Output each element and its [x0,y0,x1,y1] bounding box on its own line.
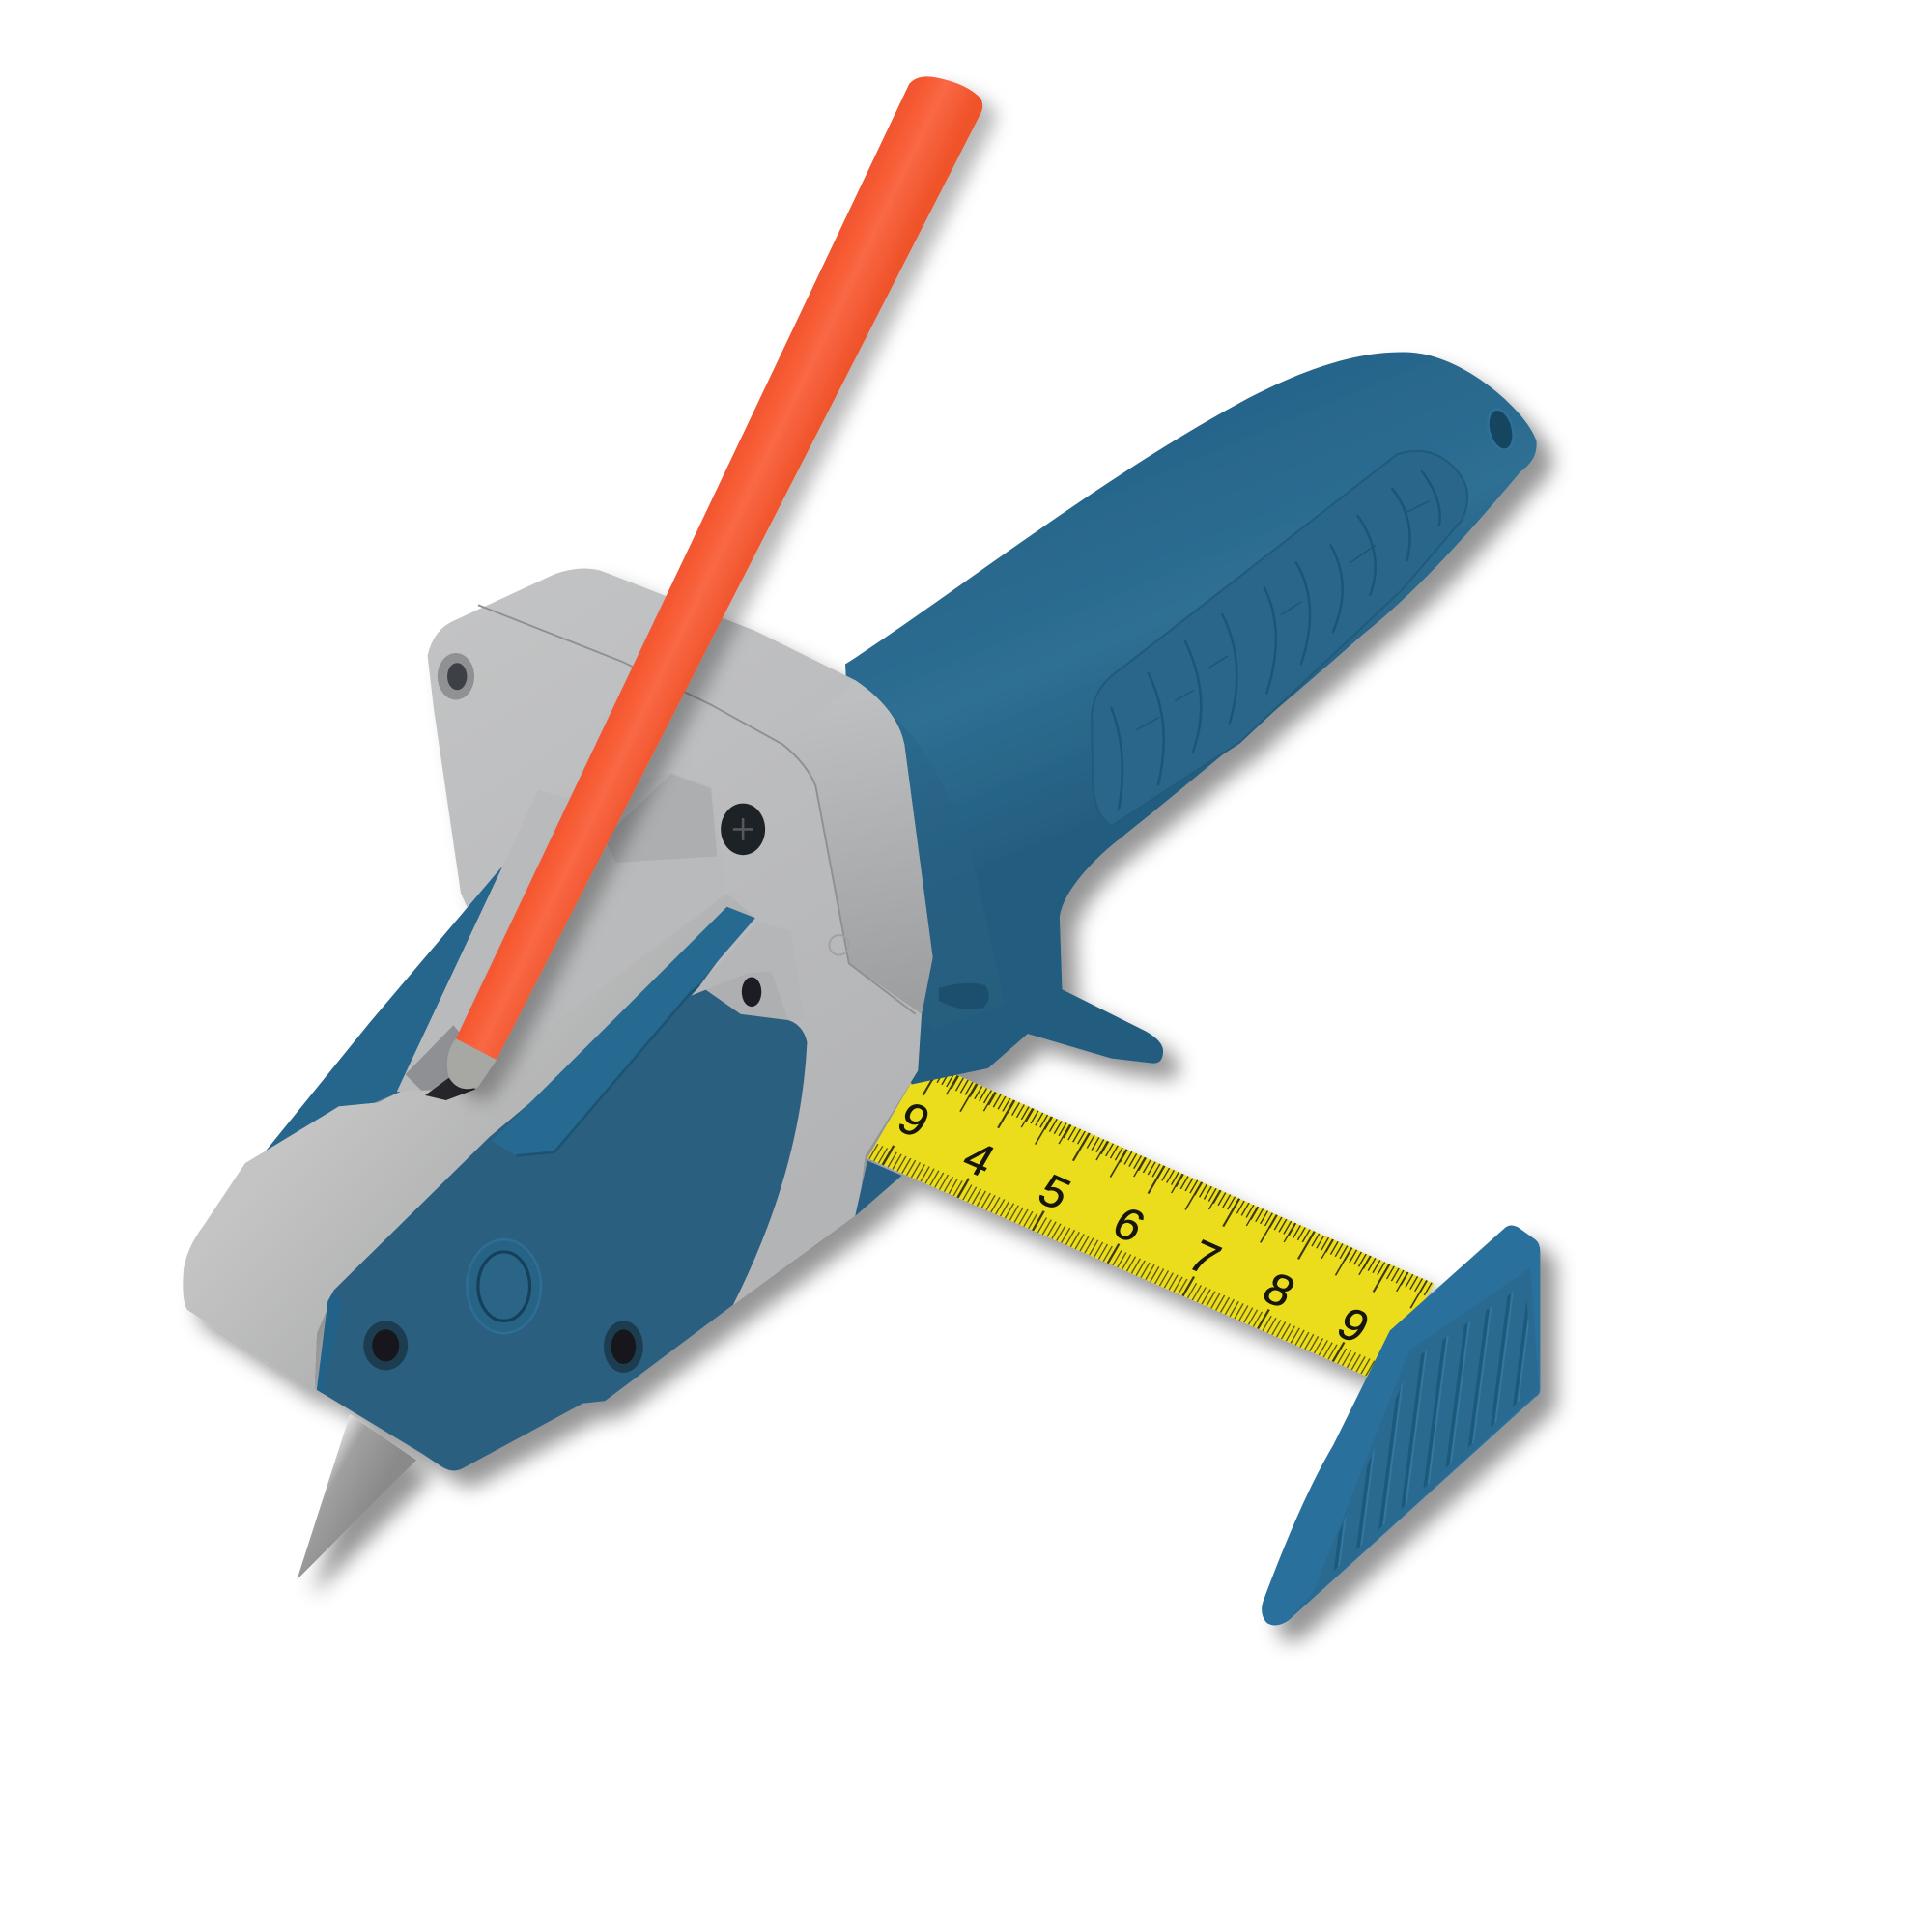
screws [363,653,765,1373]
grip panel [1092,451,1467,826]
guide slot interior [406,1025,491,1094]
guide body [397,773,727,1092]
lower body shade under housing [855,1161,902,1216]
strip groove [516,985,699,1155]
tape numbers: 7 [1179,1231,1229,1286]
blade [297,1414,416,1579]
tape numbers [883,1094,1384,1353]
screw panel right [604,1321,643,1373]
raised strip [492,907,755,1155]
pencil tip [447,1038,497,1089]
end stop ribs [1316,1284,1534,1587]
housing seam lines [478,605,916,1014]
tape numbers: 9 [1328,1298,1378,1353]
tape numbers: 9 [889,1094,938,1148]
end stop body [1262,1225,1540,1626]
pencil [447,76,982,1089]
panel shape [317,918,807,1470]
end stop ribbed face [1289,1267,1539,1619]
groove [939,983,989,1009]
panel lit edge [317,1290,343,1394]
tape numbers: 6 [1104,1198,1153,1252]
screw top left [438,653,474,699]
handle body and trigger [845,353,1537,1084]
blue side panel [317,907,807,1470]
tape numbers: 8 [1254,1264,1303,1318]
tool assembly [183,353,1540,1626]
pencil slot dark opening [425,1074,475,1100]
tape numbers: 5 [1030,1165,1079,1220]
push button [467,1239,541,1333]
pencil guide [397,773,727,1094]
left blue wing [259,838,538,1159]
wedge hole [742,977,761,1007]
guide upper shadow [604,774,717,863]
small round mark [829,935,849,955]
tape numbers: 4 [954,1132,1003,1187]
housing back plate [428,569,933,1305]
housing right side [782,680,933,1014]
pencil shaft [456,76,982,1061]
finger grip area [1092,407,1518,826]
tape blade [867,1061,1435,1381]
handle lower shade [863,690,1005,1029]
grey wedge [692,922,805,1020]
tape end stop [1262,1225,1540,1626]
nose grey casing [183,894,755,1394]
grip ribs [1112,471,1440,810]
handle [845,353,1537,1084]
tape ticks [873,1067,1431,1374]
knife blade [297,1414,416,1579]
screw middle [721,804,765,855]
lanyard hole [1484,407,1518,453]
grey wedge area below strip [692,971,788,1020]
tape measure [867,1061,1435,1381]
screw panel left [363,1321,408,1370]
